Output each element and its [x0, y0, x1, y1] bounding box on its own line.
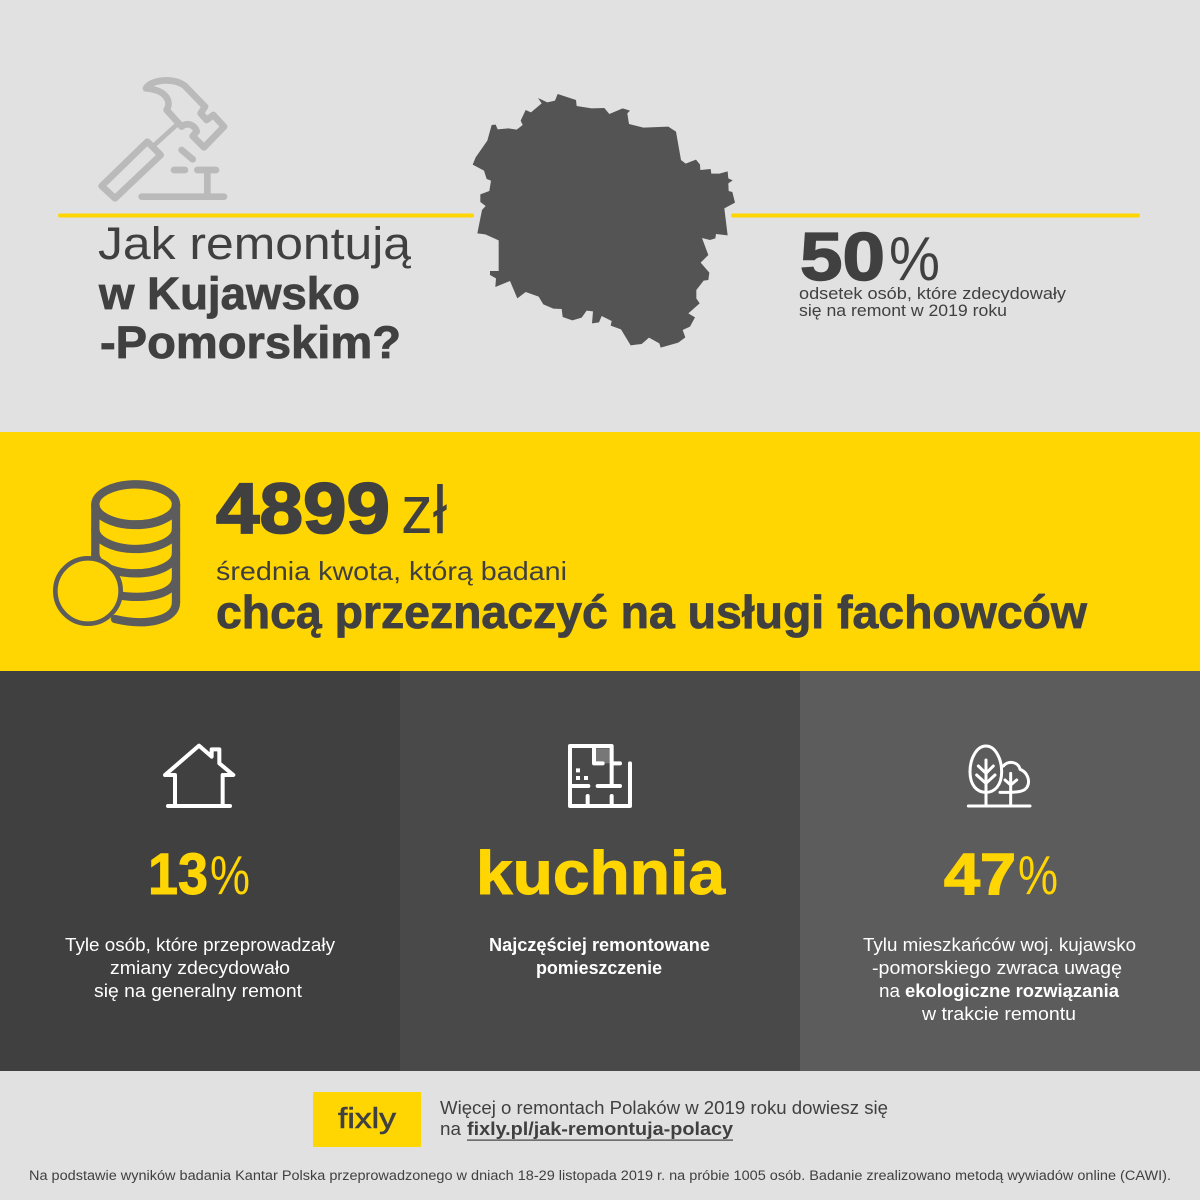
call to action: fixly.pl/jak-remontuja-polacy — [467, 1119, 733, 1139]
icon: floor plan — [570, 746, 630, 806]
description: 13 percent: zmiany zdecydowało — [110, 958, 290, 978]
description: kuchnia: Najczęściej remontowane — [489, 935, 710, 955]
icon: coins — [55, 484, 176, 624]
title: w Kujawsko — [98, 268, 360, 319]
stat: 50 percent: odsetek osób, które zdecydowały — [799, 284, 1067, 303]
title — [98, 218, 412, 368]
stat: 47 percent: % — [1018, 844, 1058, 906]
stat: kuchnia: kuchnia — [476, 839, 726, 907]
amount: 4899 zł — [216, 470, 447, 549]
amount description: średnia kwota, którą badani — [216, 556, 567, 586]
footnote: Na podstawie wyników badania Kantar Polska przeprowadzonego w dniach 18-29 listopada 2019 r. na próbie 1005 osób. Badanie zrealizowano metodą wywiadów online (CAWI). — [29, 1168, 1171, 1183]
stat: 13 percent — [148, 842, 250, 907]
amount: 4899 zł: zł — [401, 472, 447, 548]
description: 47 percent — [863, 935, 1136, 1024]
description: 13 percent: Tyle osób, które przeprowadzały — [65, 935, 335, 955]
stat: 50 percent — [799, 219, 1067, 320]
stat: 47 percent — [944, 842, 1058, 907]
logo: fixly: fixly — [338, 1103, 397, 1135]
panel: general renovation — [0, 671, 400, 1071]
stat: 47 percent: 47 — [944, 842, 1016, 907]
description: 47 percent: na — [879, 981, 901, 1001]
description: 47 percent: ekologiczne rozwiązania — [905, 981, 1120, 1001]
stat: 13 percent: % — [210, 844, 250, 906]
stat: 50 percent: % — [889, 225, 940, 294]
title: -Pomorskim? — [100, 317, 401, 368]
amount description — [216, 556, 1087, 638]
description: 47 percent: w trakcie remontu — [921, 1004, 1076, 1024]
description: 13 percent: się na generalny remont — [94, 981, 302, 1001]
panel: yellow budget band — [0, 432, 1200, 671]
panel: ecology — [800, 671, 1200, 1071]
stat: 13 percent: 13 — [148, 842, 208, 907]
stat: 50 percent: się na remont w 2019 roku — [799, 301, 1007, 320]
yellow rule: right — [731, 214, 1140, 218]
icon: trees — [968, 746, 1030, 806]
call to action: na — [440, 1119, 462, 1139]
description: 47 percent: -pomorskiego zwraca uwagę — [872, 958, 1122, 978]
logo: fixly — [313, 1092, 421, 1147]
description: kuchnia — [489, 935, 710, 978]
icon: hammer and nail — [102, 80, 224, 198]
map: Kujawsko-Pomorskie region — [473, 94, 735, 348]
call to action — [440, 1098, 888, 1141]
description: 13 percent — [65, 935, 335, 1001]
stat: 50 percent: 50 — [800, 219, 885, 295]
description: 47 percent: Tylu mieszkańców woj. kujawsko — [863, 935, 1136, 955]
panel: kitchen — [400, 671, 800, 1071]
title: Jak remontują — [98, 218, 412, 269]
description: kuchnia: pomieszczenie — [536, 958, 662, 978]
amount: 4899 zł: 4899 — [216, 470, 390, 549]
amount description: chcą przeznaczyć na usługi fachowców — [216, 586, 1087, 638]
call to action: Więcej o remontach Polaków w 2019 roku dowiesz się — [440, 1098, 888, 1118]
icon: house — [165, 746, 233, 806]
yellow rule: left — [58, 214, 474, 218]
